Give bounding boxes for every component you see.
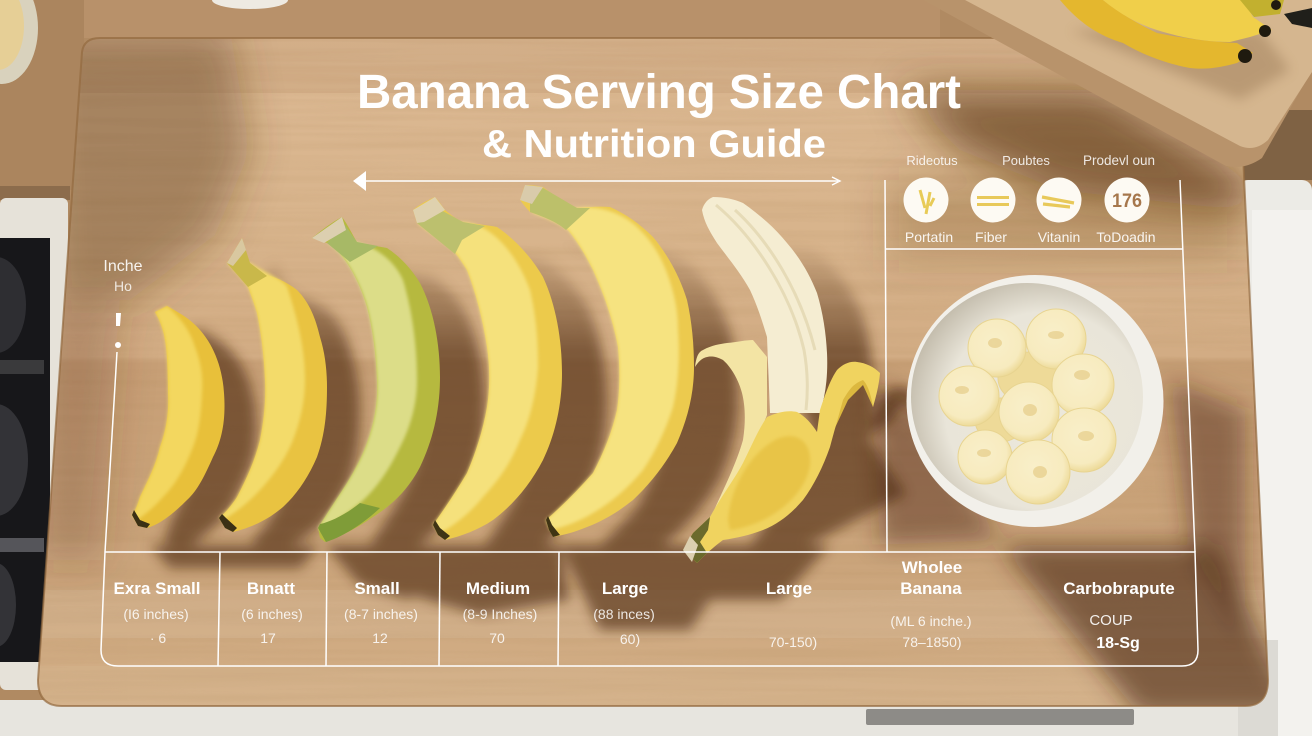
column: whole banana: 78–1850) bbox=[902, 634, 962, 650]
column: small 2: (8-7 inches) bbox=[344, 606, 418, 622]
nutrition icon row: Rideotus bbox=[906, 153, 958, 168]
column: small 1: Bınatt bbox=[247, 579, 295, 598]
axis label: inches: Ho bbox=[114, 278, 132, 294]
column: large 1: 60) bbox=[620, 631, 640, 647]
column: medium: (8-9 Inches) bbox=[463, 606, 537, 622]
nutrition icon row: ToDoadin bbox=[1096, 229, 1156, 245]
column: small 1 bbox=[241, 579, 303, 646]
white cabinet at right bbox=[1238, 180, 1312, 736]
title: Banana Serving Size Chart bbox=[357, 66, 961, 119]
white banana flesh bbox=[702, 197, 827, 413]
icon: potassium bbox=[904, 178, 948, 222]
column: large 2 bbox=[766, 579, 817, 650]
icon: number badge: 176 bbox=[1112, 191, 1142, 212]
slice centres bbox=[955, 331, 1094, 478]
banana 2: extra small 2 bbox=[219, 238, 327, 532]
icon: number badge bbox=[1104, 178, 1150, 222]
serving size table bbox=[101, 552, 1198, 666]
nutrition icon row: Fiber bbox=[975, 229, 1007, 245]
column: large 1: Large bbox=[602, 579, 648, 598]
banana 5: large bbox=[520, 185, 694, 537]
left peel bbox=[695, 340, 767, 515]
arrow: size scale bbox=[353, 171, 840, 191]
banana 4: medium bbox=[413, 197, 562, 540]
banana 3: green-tipped bbox=[312, 217, 440, 542]
nutrition icon row bbox=[904, 153, 1156, 245]
column: medium: 70 bbox=[489, 630, 505, 646]
title: & Nutrition Guide bbox=[482, 123, 826, 166]
banana 1: extra small bbox=[132, 306, 225, 528]
table frame bbox=[101, 552, 1198, 666]
front peel and lower body bbox=[683, 362, 880, 563]
column: large 1: (88 inces) bbox=[593, 606, 655, 622]
column: small 2: 12 bbox=[372, 630, 388, 646]
banana 6: peeled bbox=[683, 197, 880, 563]
column: carbohydrate: Carbobrapute bbox=[1063, 579, 1175, 598]
column: carbohydrate: COUP bbox=[1089, 612, 1133, 629]
icon: fiber bbox=[970, 178, 1016, 222]
icon: vitamin bbox=[1036, 178, 1082, 222]
column: small 1: (6 inches) bbox=[241, 606, 303, 622]
column: large 2: Large bbox=[766, 579, 812, 598]
title bbox=[357, 66, 961, 166]
broad cast shadows bbox=[40, 30, 1250, 560]
column: small 1: 17 bbox=[260, 630, 276, 646]
column: medium: Medium bbox=[466, 579, 530, 598]
column: extra small: · 6 bbox=[150, 630, 166, 646]
column: carbohydrate: 18-Sg bbox=[1096, 635, 1140, 652]
banana bunch bbox=[1060, 0, 1253, 69]
nutrition icon row: Poubtes bbox=[1002, 153, 1050, 168]
banana slices bbox=[939, 309, 1116, 504]
nutrition icon row: Prodevl oun bbox=[1083, 153, 1155, 168]
column: small 2: Small bbox=[354, 579, 400, 598]
column: whole banana bbox=[890, 558, 972, 650]
banana cast shadows bbox=[150, 219, 926, 630]
column: medium bbox=[463, 579, 537, 646]
column: large 1 bbox=[593, 579, 655, 647]
axis label: inches: Inche bbox=[103, 258, 143, 275]
column: extra small: (I6 inches) bbox=[123, 606, 189, 622]
small cutting board with bananas bbox=[923, 0, 1312, 167]
column: extra small: Exra Small bbox=[114, 579, 200, 598]
stove at left bbox=[0, 198, 68, 690]
column: small 2 bbox=[344, 579, 418, 646]
column: large 2: 70-150) bbox=[769, 634, 817, 650]
right panel frame bbox=[885, 180, 1195, 552]
column: whole banana: Wholee bbox=[902, 558, 962, 577]
bowl of banana slices bbox=[906, 275, 1164, 527]
column: carbohydrate bbox=[1063, 579, 1175, 652]
nutrition icon row: Vitanin bbox=[1038, 229, 1080, 245]
axis label: inches bbox=[103, 258, 143, 552]
column: whole banana: (ML 6 inche.) bbox=[890, 613, 972, 629]
column: extra small bbox=[114, 579, 200, 646]
column: whole banana: Banana bbox=[900, 579, 962, 598]
top-left kitchen objects bbox=[0, 0, 288, 84]
nutrition icon row: Portatin bbox=[905, 229, 953, 245]
